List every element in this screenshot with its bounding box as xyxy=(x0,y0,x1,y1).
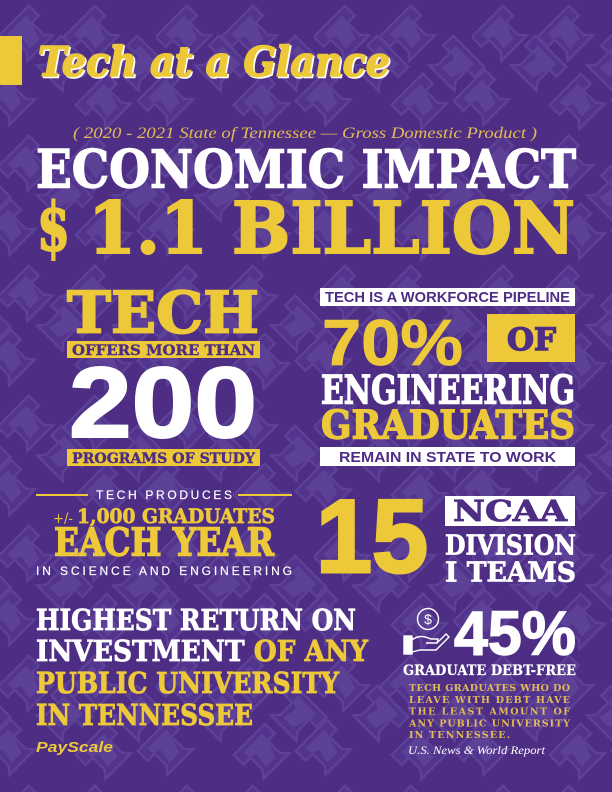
heading: 1.1 billion: 1.1 BILLION xyxy=(88,186,575,270)
1000 graduates: +/- 1,000 GRADUATES xyxy=(53,504,275,528)
panel: debt free xyxy=(403,600,576,757)
debt description: IN TENNESSEE. xyxy=(409,730,510,741)
tech label: TECH xyxy=(67,280,259,346)
title: Tech at a Glance xyxy=(38,38,390,86)
subtitle: ( 2020 - 2021 State of Tennessee — Gross Domestic Product ) xyxy=(73,125,537,142)
icon: hand holding coin xyxy=(404,608,449,654)
i teams: I TEAMS xyxy=(445,558,576,588)
payscale source: PayScale xyxy=(36,739,113,756)
debt description: TECH GRADUATES WHO DO xyxy=(409,683,570,694)
programs of study: PROGRAMS OF STUDY xyxy=(72,451,256,467)
panel: workforce pipeline xyxy=(320,288,575,466)
science and engineering: IN SCIENCE AND ENGINEERING xyxy=(36,564,292,578)
line 1: HIGHEST RETURN ON xyxy=(36,603,356,637)
line 3: PUBLIC UNIVERSITY xyxy=(36,666,339,700)
icon: hand holding coin: $ xyxy=(424,611,432,627)
ncaa box: NCAA xyxy=(453,494,568,528)
of box: OF xyxy=(507,322,556,358)
heading: 1.1 billion: $ xyxy=(37,188,70,266)
panel: return on investment xyxy=(36,603,368,732)
200 number: 200 xyxy=(69,347,257,459)
debt description: THE LEAST AMOUNT OF xyxy=(409,706,570,718)
70 percent: 70% xyxy=(322,306,463,379)
rule left xyxy=(36,494,88,496)
graduates: GRADUATES xyxy=(321,402,575,448)
graduate debt free: GRADUATE DEBT-FREE xyxy=(403,663,576,679)
rule right xyxy=(238,494,292,496)
title bar accent xyxy=(0,36,22,85)
line 2: INVESTMENT OF ANY xyxy=(36,634,368,668)
panel: 200 programs xyxy=(67,280,260,467)
45 percent: 45% xyxy=(454,600,576,668)
division: DIVISION xyxy=(445,530,576,562)
offers more than: OFFERS MORE THAN xyxy=(72,343,255,359)
debt description xyxy=(408,683,570,741)
source: U.S. News & World Report xyxy=(408,743,546,757)
tech produces: TECH PRODUCES xyxy=(96,488,232,502)
line 4: IN TENNESSEE xyxy=(36,698,253,732)
debt description: ANY PUBLIC UNIVERSITY xyxy=(408,718,570,730)
title: Tech at a Glance xyxy=(40,40,392,88)
pipeline label: TECH IS A WORKFORCE PIPELINE xyxy=(325,289,570,306)
panel: ncaa xyxy=(316,479,576,595)
15 number: 15 xyxy=(316,479,428,595)
debt description: LEAVE WITH DEBT HAVE xyxy=(409,695,570,706)
remain in state: REMAIN IN STATE TO WORK xyxy=(339,449,556,466)
panel: graduates each year xyxy=(36,488,292,578)
each year: EACH YEAR xyxy=(54,520,274,564)
of box xyxy=(487,314,575,362)
